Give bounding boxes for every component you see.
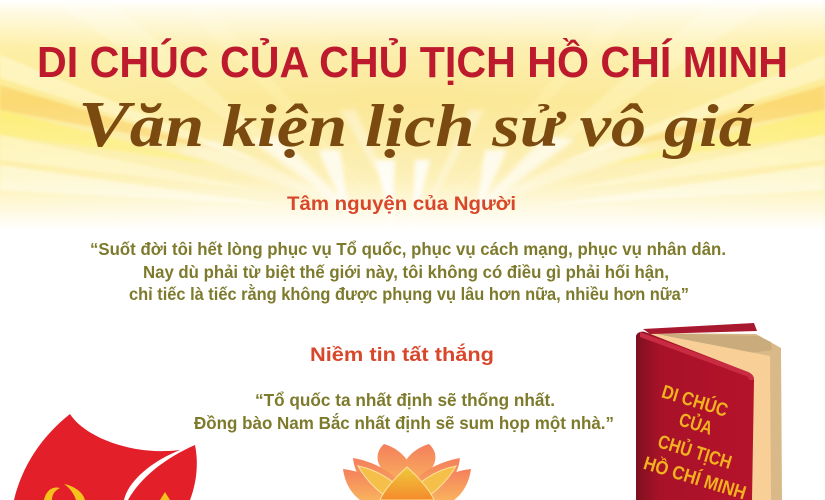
book pages — [640, 333, 782, 500]
heading: Niềm tin tất thắng: Niềm tin tất thắng — [310, 342, 494, 366]
background: sunburst — [0, 0, 825, 240]
book front cover — [636, 332, 754, 500]
quote: niềm tin: Đồng bào Nam Bắc nhất định sẽ sum họp một nhà.” — [194, 412, 614, 433]
icon: lotus — [343, 444, 471, 500]
book title: DI CHÚC — [659, 381, 731, 422]
quote: niềm tin — [194, 390, 614, 433]
heading: Tâm nguyện của Người: Tâm nguyện của Người — [287, 193, 516, 215]
quote: tâm nguyện: Nay dù phải từ biệt thế giới này, tôi không có điều gì phải hối hận, — [143, 262, 669, 282]
quote: tâm nguyện — [90, 239, 726, 304]
title: DI CHÚC CỦA CHỦ TỊCH HỒ CHÍ MINH — [37, 36, 788, 87]
icon: party flag — [14, 414, 197, 500]
quote: niềm tin: “Tổ quốc ta nhất định sẽ thống nhất. — [255, 390, 555, 410]
book title: CỦA — [676, 409, 715, 440]
book title: CHỦ TỊCH — [655, 431, 734, 474]
book back cover edge — [643, 323, 757, 334]
subtitle: Văn kiện lịch sử vô giá — [78, 88, 755, 161]
icon: book — [636, 323, 782, 500]
quote: tâm nguyện: chỉ tiếc là tiếc rằng không được phụng vụ lâu hơn nữa, nhiều hơn nữa” — [129, 283, 689, 304]
book title — [641, 381, 749, 500]
quote: tâm nguyện: “Suốt đời tôi hết lòng phục vụ Tổ quốc, phục vụ cách mạng, phục vụ nhân dân. — [90, 239, 726, 259]
